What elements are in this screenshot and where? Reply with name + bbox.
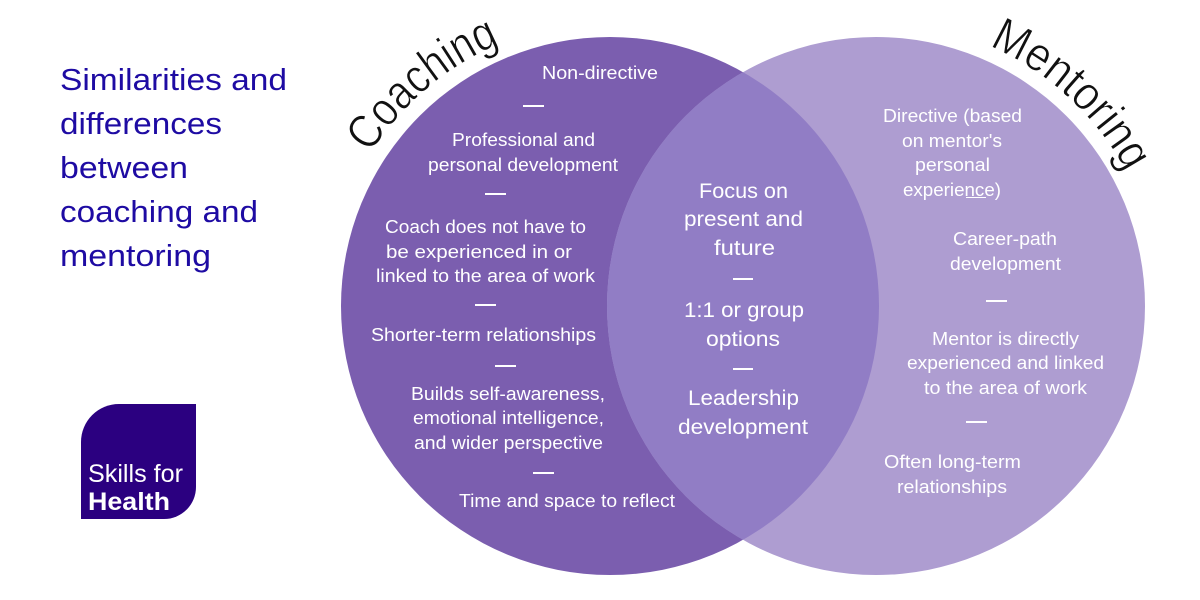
mentoring list: experience)	[903, 180, 1001, 200]
mentoring list: Often long-term	[884, 452, 1021, 472]
label: Mentoring: Mentoring	[992, 18, 1146, 172]
circle overlap	[607, 72, 879, 540]
title	[60, 62, 287, 273]
mentoring list: Career-path	[953, 229, 1057, 249]
logo: Skills for Health: Health	[88, 488, 170, 516]
mentoring list: relationships	[897, 477, 1007, 497]
title: between	[60, 150, 188, 185]
coaching list: linked to the area of work	[376, 266, 596, 286]
mentoring list: personal	[915, 155, 990, 175]
title: mentoring	[60, 238, 211, 273]
mentoring list	[883, 106, 1104, 497]
circle: coaching	[341, 37, 879, 575]
mentoring list: on mentor's	[902, 131, 1002, 151]
shared list: future	[714, 237, 775, 260]
shared list: Leadership	[688, 387, 799, 410]
shared list: Focus on	[699, 180, 788, 203]
shared list: 1:1 or group	[684, 299, 804, 322]
coaching list: Professional and	[452, 130, 595, 150]
shared list: present and	[684, 208, 803, 231]
title: Similarities and	[60, 62, 287, 97]
logo: Skills for Health: Skills for	[88, 460, 183, 488]
coaching list: Coach does not have to	[385, 217, 586, 237]
title: coaching and	[60, 194, 258, 229]
title: differences	[60, 106, 222, 141]
logo: Skills for Health	[81, 404, 196, 519]
coaching list: Shorter-term relationships	[371, 325, 596, 345]
mentoring list: experienced and linked	[907, 353, 1104, 373]
coaching list: and wider perspective	[414, 433, 603, 453]
circle: mentoring	[607, 37, 1145, 575]
mentoring list: development	[950, 254, 1061, 274]
mentoring list: to the area of work	[924, 378, 1088, 398]
coaching list: Time and space to reflect	[459, 491, 675, 511]
mentoring list: Mentor is directly	[932, 329, 1079, 349]
coaching list: personal development	[428, 155, 618, 175]
shared list	[678, 180, 808, 439]
shared list: development	[678, 416, 808, 439]
shared list: options	[706, 328, 780, 351]
coaching list: Non-directive	[542, 63, 658, 83]
coaching list: be experienced in or	[386, 242, 572, 262]
coaching list: Builds self-awareness,	[411, 384, 605, 404]
coaching list: emotional intelligence,	[413, 408, 604, 428]
mentoring list: Directive (based	[883, 106, 1022, 126]
coaching list	[371, 63, 675, 511]
label: Coaching: Coaching	[350, 22, 498, 146]
